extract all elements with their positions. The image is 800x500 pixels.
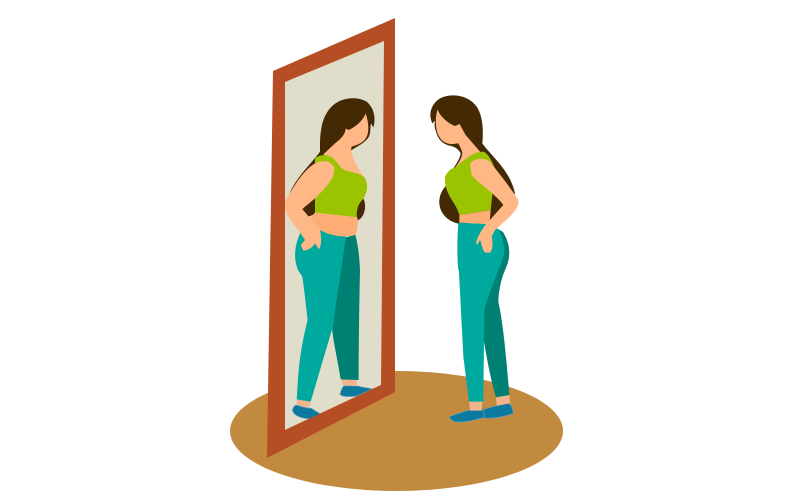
reflection shoes (292, 386, 372, 419)
woman crop top (445, 152, 495, 215)
reflection face and neck (323, 113, 368, 178)
woman pants top (457, 223, 505, 270)
reflection midriff (310, 213, 358, 236)
reflection crop top (315, 155, 367, 217)
reflection arm and hand (285, 161, 334, 251)
reflection hair (289, 98, 375, 220)
floor ellipse (230, 371, 563, 491)
mirror glass (285, 41, 384, 430)
reflection figure (285, 98, 375, 419)
woman shoes (449, 403, 513, 422)
woman arm and hand (470, 159, 519, 253)
reflection front leg (297, 270, 341, 402)
reflection upper body (285, 155, 367, 270)
woman back leg (482, 270, 509, 397)
woman lower body (458, 260, 510, 411)
woman ankles (469, 395, 510, 411)
reflection pants top (295, 230, 347, 270)
woman midriff (459, 210, 491, 224)
reflection back leg (332, 270, 360, 380)
woman hair (430, 95, 515, 224)
woman front leg (458, 260, 499, 402)
woman face and neck (436, 109, 480, 170)
reflection ankles (297, 379, 357, 407)
reflection lower body (297, 270, 360, 407)
woman figure (430, 95, 519, 422)
woman upper body (445, 152, 519, 270)
mirror frame (267, 18, 395, 458)
